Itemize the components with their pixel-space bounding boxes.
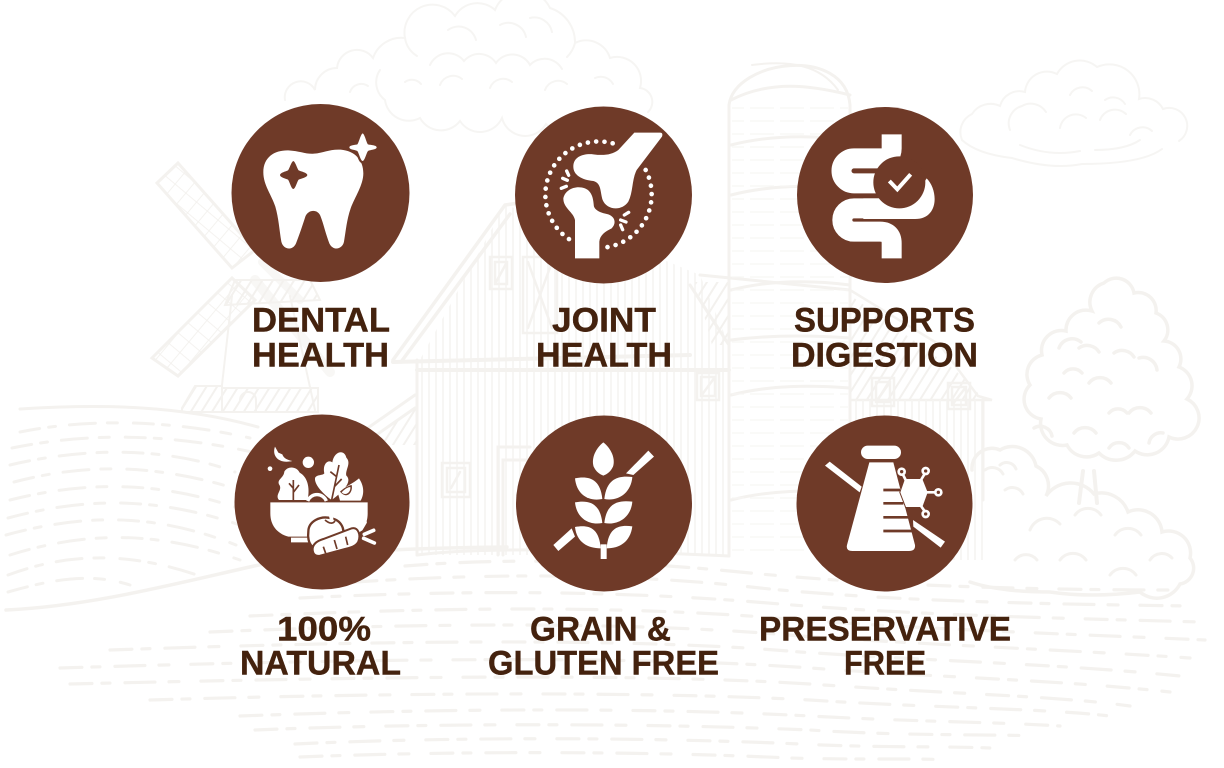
badge circle xyxy=(232,104,410,282)
background: left cloud xyxy=(285,0,652,136)
label: dental health xyxy=(252,302,390,374)
background: barn xyxy=(365,200,850,556)
icon: tooth with sparkles xyxy=(263,133,377,249)
label: dental health: HEALTH xyxy=(252,336,389,374)
badge circle xyxy=(515,106,692,284)
label: supports digestion: DIGESTION xyxy=(791,336,978,374)
background: right cloud xyxy=(960,60,1187,166)
panel: preservative free xyxy=(759,416,1011,682)
label: supports digestion: SUPPORTS xyxy=(794,302,975,340)
background: right barn wing xyxy=(850,290,992,560)
background: tree xyxy=(1024,278,1199,503)
icon: crossed-out wheat xyxy=(553,442,654,559)
label: supports digestion xyxy=(791,302,978,374)
panel: grain and gluten free xyxy=(488,416,719,682)
icon: joint xyxy=(545,133,662,258)
label: preservative free: FREE xyxy=(844,644,926,682)
label: 100% natural: NATURAL xyxy=(240,644,401,682)
badge circle xyxy=(796,416,972,592)
background: silo xyxy=(729,63,850,555)
background: windmill xyxy=(152,163,330,412)
label: 100% natural: 100% xyxy=(277,610,371,648)
label: joint health xyxy=(536,302,672,374)
icon: crossed-out flask with molecule xyxy=(825,446,945,551)
badge circle xyxy=(797,107,973,283)
badge circle xyxy=(516,416,692,592)
label: joint health: JOINT xyxy=(552,302,656,340)
label: preservative free xyxy=(759,610,1011,682)
panel: 100% natural xyxy=(234,414,410,682)
background: foreground ground strokes xyxy=(60,561,1205,760)
label: joint health: HEALTH xyxy=(536,336,672,374)
background: left field xyxy=(6,407,507,610)
panel: joint health xyxy=(515,106,692,374)
label: 100% natural xyxy=(240,610,401,682)
panel: supports digestion xyxy=(791,107,978,374)
label: dental health: DENTAL xyxy=(252,302,390,340)
badge circle xyxy=(234,414,410,590)
label: grain and gluten free: GLUTEN FREE xyxy=(488,644,719,682)
icon: salad bowl xyxy=(268,447,374,556)
label: grain and gluten free: GRAIN & xyxy=(530,610,671,648)
label: grain and gluten free xyxy=(488,610,719,682)
background: bushes xyxy=(970,447,1194,598)
label: preservative free: PRESERVATIVE xyxy=(759,610,1011,648)
panel: dental health xyxy=(232,104,410,374)
icon: intestine with check xyxy=(841,134,935,258)
